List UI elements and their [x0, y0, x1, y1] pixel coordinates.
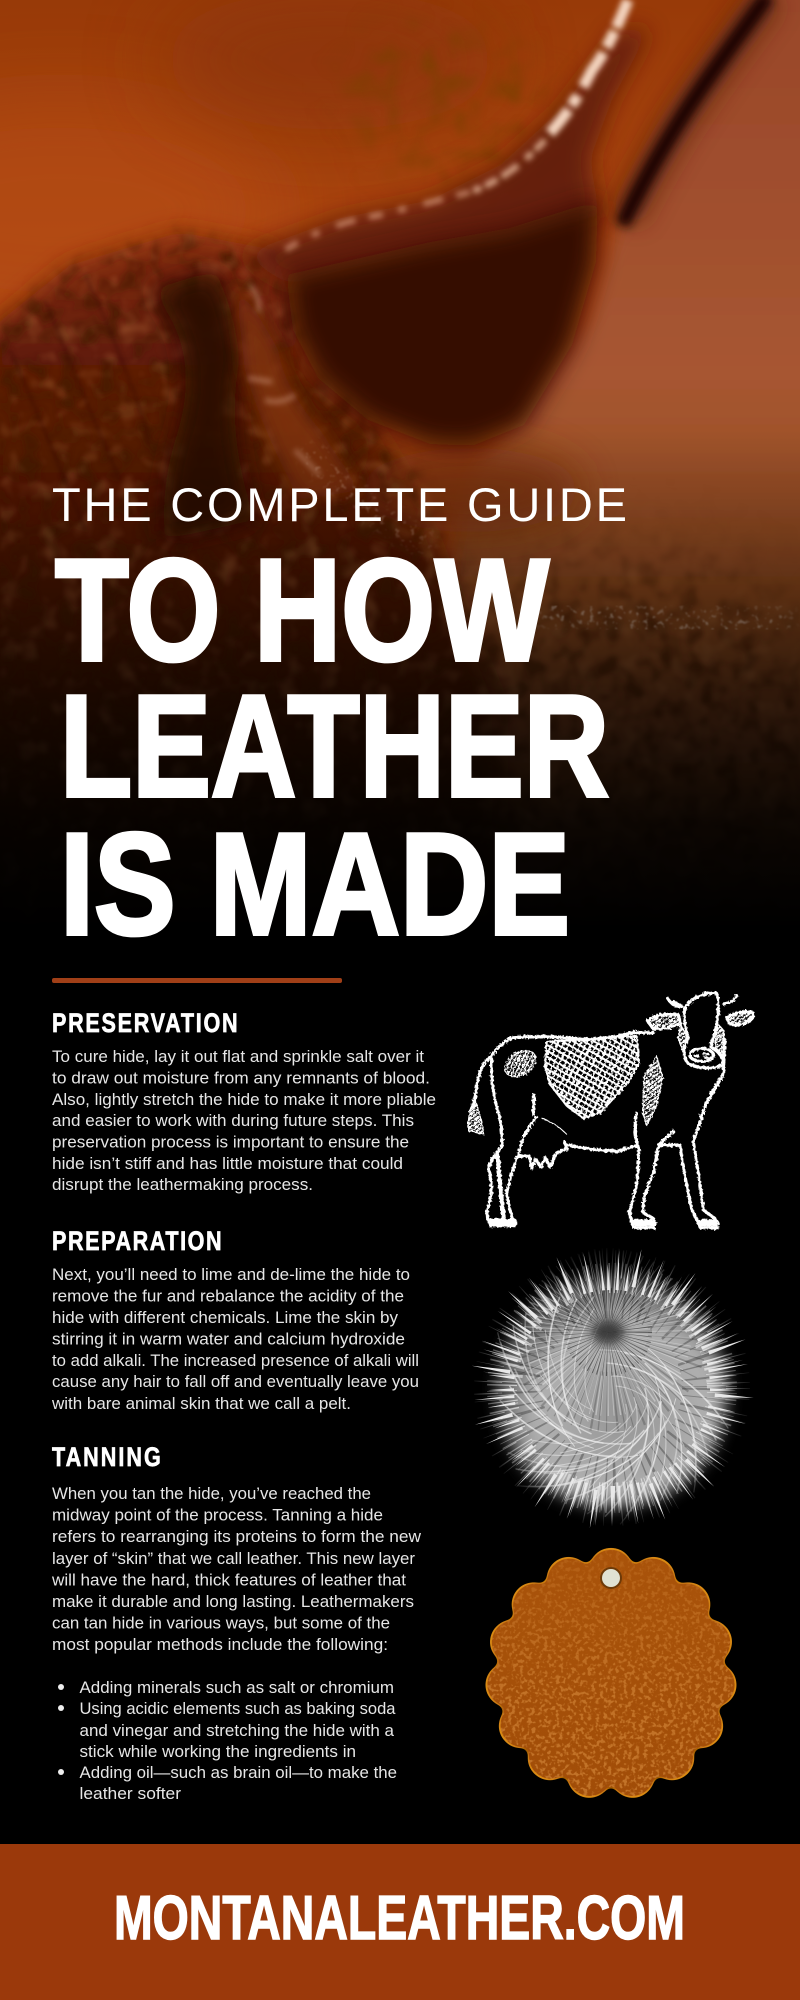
- bullet list: tanning methods: Using acidic elements such as baking soda: [80, 1699, 396, 1718]
- body: tanning: will have the hard, thick features of leather that: [51, 1570, 406, 1590]
- body: preparation: Next, you’ll need to lime and de-lime the hide to: [52, 1265, 410, 1284]
- section: preparation: [51, 1227, 419, 1413]
- body: preparation: with bare animal skin that we call a pelt.: [51, 1394, 351, 1413]
- bullet list: tanning methods: [58, 1678, 397, 1803]
- bullet list: tanning methods: and vinegar and stretching the hide with a: [80, 1721, 395, 1740]
- body: tanning: When you tan the hide, you’ve reached the: [52, 1484, 371, 1503]
- title: to how leather is made: IS MADE: [60, 803, 570, 965]
- body: preparation: cause any hair to fall off and eventually leave you: [52, 1372, 419, 1391]
- body: tanning: [51, 1484, 422, 1654]
- body: preservation: To cure hide, lay it out flat and sprinkle salt over it: [52, 1047, 424, 1066]
- heading: preparation: PREPARATION: [52, 1227, 222, 1257]
- subtitle: the complete guide: THE COMPLETE GUIDE: [52, 478, 627, 531]
- body: preservation: hide isn’t stiff and has little moisture that could: [52, 1154, 403, 1173]
- hero photo: leather close-up: [0, 0, 800, 870]
- title: to how leather is made: TO HOW: [55, 529, 549, 691]
- section: preservation: [52, 1009, 436, 1194]
- icon: chalk cow: [468, 993, 753, 1228]
- body: preservation: Also, lightly stretch the hide to make it more pliable: [52, 1090, 436, 1109]
- title: to how leather is made: LEATHER: [60, 665, 609, 827]
- body: preservation: preservation process is important to ensure the: [52, 1132, 409, 1152]
- body: preservation: and easier to work with during future steps. This: [52, 1111, 414, 1130]
- body: preparation: to add alkali. The increased presence of alkali will: [52, 1351, 419, 1370]
- bullet list: tanning methods: stick while working the ingredients in: [80, 1742, 356, 1761]
- title: to how leather is made: [55, 529, 609, 965]
- icon: scalloped leather tag: [485, 1548, 736, 1798]
- body: preparation: remove the fur and rebalance the acidity of the: [52, 1286, 404, 1306]
- body: preparation: [51, 1265, 419, 1413]
- bullet list: tanning methods: Adding minerals such as salt or chromium: [80, 1678, 394, 1697]
- bullet list: tanning methods: Adding oil—such as brain oil—to make the: [80, 1763, 397, 1782]
- section: tanning: [51, 1443, 422, 1803]
- heading: preservation: PRESERVATION: [52, 1009, 238, 1039]
- body: preservation: [52, 1047, 436, 1194]
- icon: fur tuft: [472, 1248, 754, 1528]
- body: tanning: refers to rearranging its proteins to form the new: [52, 1527, 422, 1546]
- tag eyelet: [600, 1567, 622, 1589]
- body: tanning: layer of “skin” that we call leather. This new layer: [52, 1549, 415, 1568]
- body: preservation: to draw out moisture from any remnants of blood.: [52, 1068, 430, 1088]
- body: tanning: midway point of the process. Tanning a hide: [52, 1506, 383, 1524]
- heading: tanning: TANNING: [52, 1443, 161, 1473]
- accent rule: [52, 978, 342, 983]
- body: tanning: make it durable and long lasting. Leathermakers: [52, 1592, 414, 1611]
- body: tanning: most popular methods include the following:: [52, 1635, 388, 1654]
- body: tanning: can tan hide in various ways, but some of the: [52, 1614, 390, 1632]
- body: preservation: disrupt the leathermaking process.: [52, 1175, 313, 1194]
- body: preparation: stirring it in warm water and calcium hydroxide: [52, 1330, 405, 1348]
- bullet list: tanning methods: leather softer: [80, 1784, 181, 1803]
- body: preparation: hide with different chemicals. Lime the skin by: [52, 1308, 398, 1327]
- footer band: [0, 1844, 800, 2000]
